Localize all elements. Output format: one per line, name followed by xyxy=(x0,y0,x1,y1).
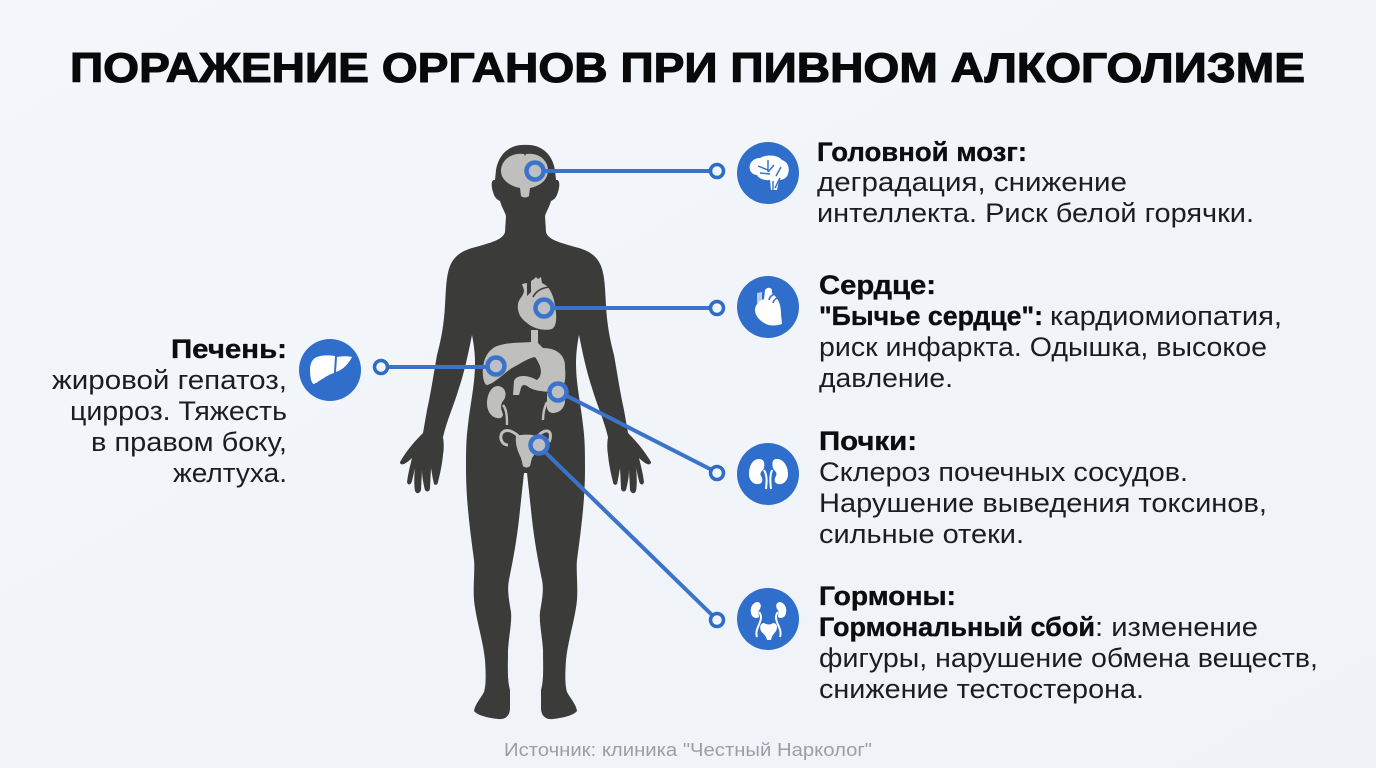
text block: kidneys: Почки: xyxy=(819,426,917,456)
text block: hormones: : изменение xyxy=(1095,612,1258,642)
text block: heart: "Бычье сердце": xyxy=(819,301,1043,331)
text block: kidneys: Нарушение выведения токсинов, xyxy=(819,488,1267,518)
organ marker: kidney xyxy=(550,384,566,400)
organs xyxy=(483,154,565,468)
icon: brain xyxy=(737,142,799,204)
text block: brain: Головной мозг: xyxy=(817,137,1027,167)
connector lines xyxy=(387,171,712,615)
text block: kidneys xyxy=(819,426,1267,549)
text block: hormones xyxy=(819,581,1318,704)
icon: kidneys xyxy=(737,443,799,505)
organ: liver and stomach xyxy=(483,330,565,395)
text block: heart xyxy=(819,270,1282,393)
text block: brain xyxy=(817,137,1254,228)
organ marker: hormones xyxy=(530,436,548,454)
text block: heart: кардиомиопатия, xyxy=(1050,301,1282,331)
organ: right kidney xyxy=(543,393,565,420)
organ marker: liver xyxy=(488,358,504,374)
text block: heart: Сердце: xyxy=(819,270,936,300)
icon: liver xyxy=(299,339,361,401)
text block: liver xyxy=(52,334,287,488)
organ: left kidney xyxy=(487,386,507,425)
text block: liver: в правом боку, xyxy=(91,427,287,457)
text block: liver: желтуха. xyxy=(173,458,287,488)
text block: brain: деградация, снижение xyxy=(817,167,1127,197)
connector end rings xyxy=(374,164,724,626)
icon: heart xyxy=(737,276,799,338)
text block: hormones: Гормональный сбой xyxy=(819,612,1095,642)
organ: uterus xyxy=(501,431,550,468)
text block: hormones: Гормоны: xyxy=(819,581,956,611)
text block: brain: интеллекта. Риск белой горячки. xyxy=(817,198,1254,228)
text block: heart: давление. xyxy=(819,363,953,393)
icon: urinary system xyxy=(737,588,799,650)
organ marker: brain xyxy=(526,162,544,180)
source note: Источник: клиника "Честный Нарколог" xyxy=(504,740,872,760)
text block: liver: Печень: xyxy=(171,334,287,364)
text block: kidneys: Склероз почечных сосудов. xyxy=(819,457,1188,487)
text block: hormones: фигуры, нарушение обмена веществ, xyxy=(819,643,1318,673)
organ: brain xyxy=(501,154,548,198)
text block: liver: цирроз. Тяжесть xyxy=(70,396,287,426)
text block: heart: риск инфаркта. Одышка, высокое xyxy=(819,332,1267,362)
human body silhouette xyxy=(400,145,651,719)
text block: liver: жировой гепатоз, xyxy=(52,365,287,395)
organ: heart xyxy=(518,277,556,330)
organ marker: heart xyxy=(536,300,552,316)
text block: hormones: снижение тестостерона. xyxy=(819,674,1144,704)
text block: kidneys: сильные отеки. xyxy=(819,519,1024,549)
title: ПОРАЖЕНИЕ ОРГАНОВ ПРИ ПИВНОМ АЛКОГОЛИЗМЕ xyxy=(70,44,1305,91)
